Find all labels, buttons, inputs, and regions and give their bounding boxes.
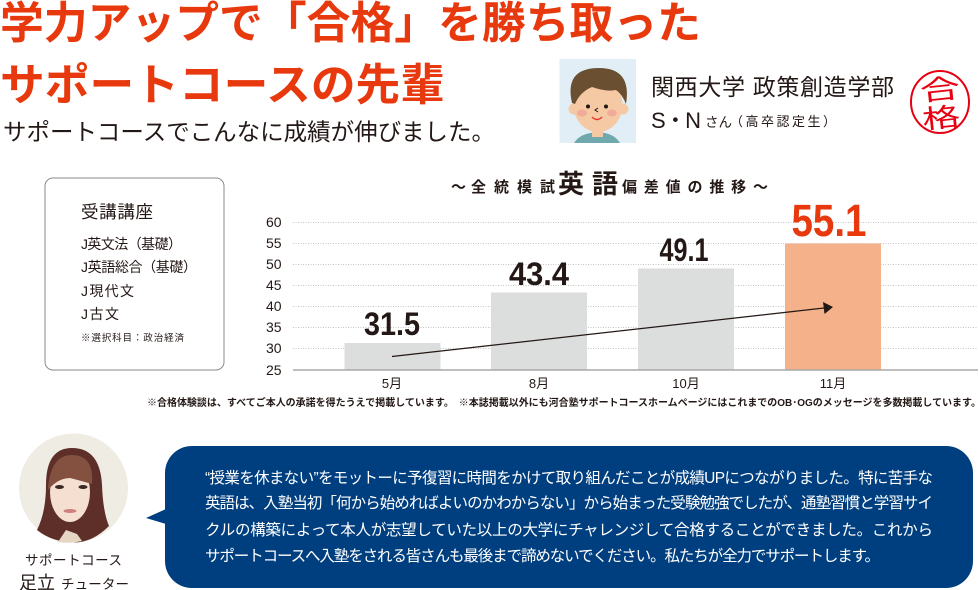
course list (81, 236, 197, 322)
bar value labels: 31.5 (364, 306, 420, 342)
chart title: ～ (451, 179, 466, 196)
bar value labels (364, 195, 866, 342)
icon: pass stamp: 格 (921, 101, 962, 135)
title: サポートコースの先輩 (0, 61, 445, 110)
course list: J英語総合（基礎） (81, 259, 197, 275)
course heading: 受講講座 (81, 202, 153, 222)
tutor caption (19, 553, 129, 590)
quote text (205, 469, 933, 565)
bar value labels: 49.1 (660, 232, 708, 268)
month labels (382, 376, 846, 391)
y axis labels: 60 (266, 214, 282, 230)
footnote: ※合格体験談は、すべてご本人の承諾を得たうえで掲載しています。 ※本誌掲載以外にも河合塾サポートコースホームページにはこれまでのOB･OGのメッセージを多数掲載しています。 (147, 396, 980, 409)
bar value labels: 43.4 (509, 256, 569, 292)
elective note: ※選択科目：政治経済 (81, 332, 184, 344)
student name: さん (705, 115, 732, 130)
student name: （高卒認定生） (730, 114, 836, 129)
title: 学力アップで「合格」を勝ち取った (0, 0, 701, 48)
chart title: 全統模試 (471, 178, 555, 196)
y axis labels: 35 (266, 319, 282, 335)
course list: J英文法（基礎） (81, 236, 182, 252)
quote text: 英語は、入塾当初「何から始めればよいのかわからない」から始まった受験勉強でしたが、通塾習慣と学習サイ (205, 494, 933, 512)
bars (344, 244, 881, 370)
speech bubble (146, 446, 973, 588)
subtitle: サポートコースでこんなに成績が伸びました。 (3, 119, 495, 145)
student name: S・N (651, 108, 701, 133)
month labels: 10月 (672, 376, 700, 391)
quote text: サポートコースへ入塾をされる皆さんも最後まで諦めないでください。私たちが全力でサポートします。 (205, 547, 880, 565)
y axis labels (266, 214, 282, 378)
y axis labels: 30 (266, 340, 282, 356)
y axis labels: 25 (266, 362, 282, 378)
icon: student illustration (560, 59, 636, 143)
chart title (451, 169, 768, 199)
chart title: 英語 (558, 169, 618, 199)
y axis labels: 45 (266, 277, 282, 293)
title (0, 0, 701, 110)
student university: 関西大学 政策創造学部 (651, 74, 894, 100)
tutor caption: サポートコース (25, 553, 122, 568)
chart title: 偏差値の推移～ (622, 178, 768, 196)
month labels: 5月 (382, 376, 402, 391)
arrow: upward trend (392, 302, 833, 356)
course list: J現代文 (81, 283, 134, 299)
y axis labels: 55 (266, 235, 282, 251)
y axis labels: 50 (266, 256, 282, 272)
month labels: 8月 (529, 376, 549, 391)
quote text: クルの構築によって本人が志望していた以上の大学にチャレンジして合格することができました。これから (205, 521, 933, 539)
quote text: “授業を休まない”をモットーに予復習に時間をかけて取り組んだことが成績UPにつながりました。特に苦手な (205, 469, 933, 487)
course list: J古文 (81, 306, 119, 322)
bar chart (266, 195, 978, 391)
student name (651, 108, 836, 133)
y axis labels: 40 (266, 298, 282, 314)
month labels: 11月 (820, 376, 846, 391)
icon: pass stamp (911, 71, 969, 135)
icon: pass stamp: 合 (919, 73, 961, 107)
tutor photo (19, 434, 128, 543)
panel: courses (45, 178, 224, 370)
bar value labels: 55.1 (792, 195, 866, 246)
